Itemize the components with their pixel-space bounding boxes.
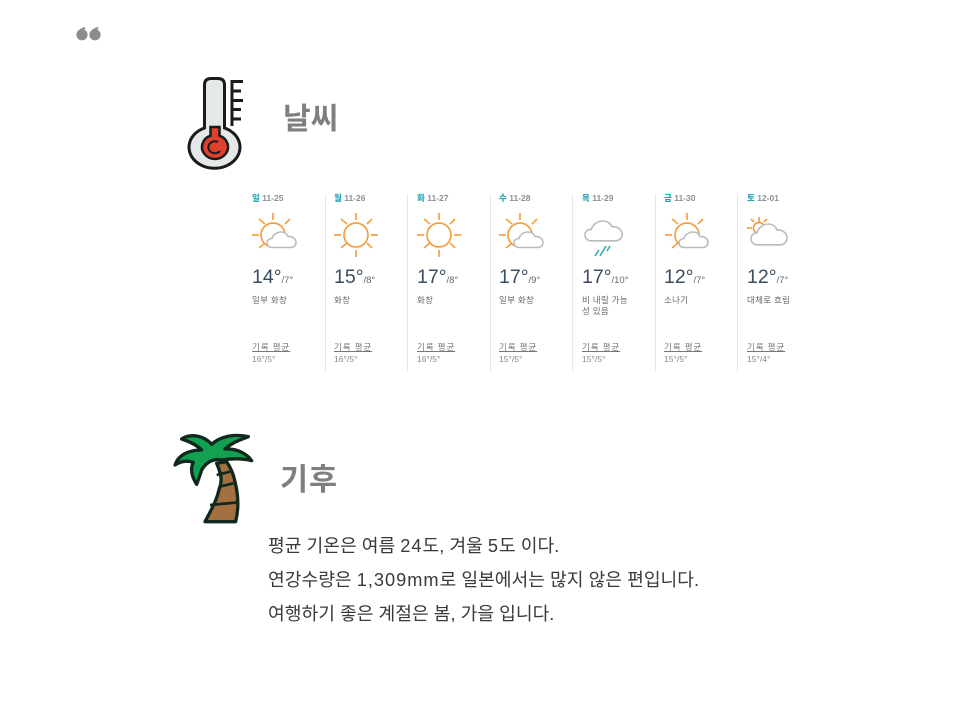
forecast day: Sunday <box>252 193 297 364</box>
forecast day: Thursday <box>582 193 629 364</box>
forecast day: Thursday: 비 내릴 가능 <box>582 295 628 305</box>
forecast day: Wednesday: 기록 평균 <box>499 342 537 352</box>
forecast day: Friday <box>664 193 709 364</box>
forecast day: Wednesday: 수 11-28 <box>499 193 530 203</box>
forecast day: Tuesday: 17°/8° <box>417 266 458 288</box>
forecast day: Wednesday: 일부 화창 <box>499 295 534 305</box>
forecast day: Friday: 기록 평균 <box>664 342 702 352</box>
text block: climate description: 여행하기 좋은 계절은 봄, 가을 입니다. <box>268 604 554 624</box>
icon: quotation mark <box>76 27 101 40</box>
icon: thermometer <box>188 77 243 170</box>
forecast day: Sunday: 16°/5° <box>252 354 275 364</box>
text block: climate description <box>268 536 699 624</box>
forecast day: Saturday: 대체로 흐림 <box>747 295 790 305</box>
forecast day: Thursday: 17°/10° <box>582 266 629 288</box>
forecast day: Saturday: 토 12-01 <box>747 193 779 203</box>
forecast day: Thursday: 성 있음 <box>582 306 609 316</box>
forecast day: Saturday <box>747 193 790 364</box>
heading: climate: 기후 <box>280 463 338 497</box>
forecast day: Tuesday: 16°/5° <box>417 354 440 364</box>
forecast day: Friday: 금 11-30 <box>664 193 695 203</box>
forecast day: Thursday: 15°/5° <box>582 354 605 364</box>
forecast day: Monday: 15°/8° <box>334 266 375 288</box>
forecast day: Wednesday: 15°/5° <box>499 354 522 364</box>
forecast day: Monday <box>334 193 378 364</box>
icon: palm tree <box>173 434 254 524</box>
forecast day: Saturday: 기록 평균 <box>747 342 785 352</box>
forecast day: Wednesday <box>499 193 544 364</box>
forecast day: Sunday: 일 11-25 <box>252 193 283 203</box>
forecast day: Thursday: 기록 평균 <box>582 342 620 352</box>
forecast day: Monday: 16°/5° <box>334 354 357 364</box>
forecast day: Friday: 12°/7° <box>664 266 705 288</box>
text block: climate description: 연강수량은 1,309mm로 일본에서는 많지 않은 편입니다. <box>268 570 699 590</box>
text block: climate description: 평균 기온은 여름 24도, 겨울 5도 이다. <box>268 536 559 556</box>
forecast day: Thursday: 목 11-29 <box>582 193 613 203</box>
forecast day: Saturday: 12°/7° <box>747 266 788 288</box>
forecast day: Tuesday <box>417 193 461 364</box>
forecast day: Sunday: 일부 화창 <box>252 295 287 305</box>
forecast day: Saturday: 15°/4° <box>747 354 770 364</box>
forecast day: Sunday: 기록 평균 <box>252 342 290 352</box>
forecast day: Monday: 월 11-26 <box>334 193 365 203</box>
forecast day: Sunday: 14°/7° <box>252 266 293 288</box>
forecast day: Friday: 소나기 <box>664 295 688 305</box>
forecast day: Friday: 15°/5° <box>664 354 687 364</box>
forecast day: Monday: 기록 평균 <box>334 342 372 352</box>
forecast day: Monday: 화창 <box>334 295 350 305</box>
forecast day: Tuesday: 화 11-27 <box>417 193 448 203</box>
forecast day: Tuesday: 화창 <box>417 295 433 305</box>
weather forecast table <box>252 193 790 372</box>
heading: weather: 날씨 <box>283 103 338 136</box>
forecast day: Wednesday: 17°/9° <box>499 266 540 288</box>
forecast day: Tuesday: 기록 평균 <box>417 342 455 352</box>
